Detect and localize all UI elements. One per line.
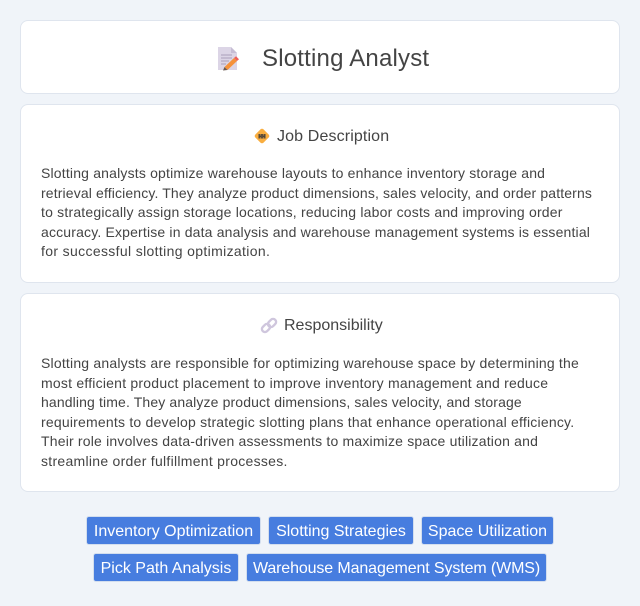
text: job description: for successful slotting optimization. — [41, 243, 270, 259]
tag: slotting strategies: Slotting Strategies — [276, 523, 406, 540]
tag: inventory optimization: Inventory Optimization — [94, 523, 253, 540]
text: responsibility: handling time. They analyze product dimensions, sales velocity, and storage — [41, 394, 522, 410]
panel: title card — [20, 20, 620, 94]
tag: space utilization: Space Utilization — [428, 523, 547, 540]
tag: warehouse management system — [246, 553, 547, 582]
text: job description: Slotting analysts optimize warehouse layouts to enhance inventory storage and — [41, 165, 545, 181]
panel: job description — [20, 104, 620, 283]
panel: responsibility — [20, 293, 620, 492]
tag: pick path analysis: Pick Path Analysis — [101, 560, 231, 577]
text: responsibility: most efficient product placement to improve inventory management and reduce — [41, 374, 548, 390]
icon: diamond sign — [254, 128, 270, 144]
tag: space utilization — [421, 516, 554, 545]
title: Slotting Analyst — [262, 45, 429, 72]
text: responsibility: Slotting analysts are responsible for optimizing warehouse space by determining the — [41, 355, 579, 371]
icon: link — [260, 318, 278, 334]
text: responsibility: Their role involves data-driven assessments to maximize space utilization and — [41, 433, 538, 449]
text: responsibility: requirements to develop strategic slotting plans that enhance operational efficiency. — [41, 414, 574, 430]
text: job description: to strategically assign storage locations, reducing labor costs and improving order — [41, 204, 563, 220]
text: job description: accuracy. Expertise in data analysis and warehouse management systems is essential — [41, 224, 590, 240]
heading: job description: Job Description — [277, 128, 389, 145]
text: responsibility: streamline order fulfillment processes. — [41, 452, 288, 468]
text: responsibility — [41, 355, 579, 469]
text: job description — [41, 165, 592, 259]
tag: pick path analysis — [93, 553, 239, 582]
icon: memo with pencil — [218, 47, 239, 70]
text: job description: retrieval efficiency. They analyze product dimensions, sales velocity, and order patterns — [41, 184, 592, 200]
tag: warehouse management system: Warehouse Management System (WMS) — [253, 560, 540, 577]
tag: slotting strategies — [268, 516, 414, 545]
tag: inventory optimization — [86, 516, 261, 545]
heading: responsibility: Responsibility — [284, 317, 383, 334]
